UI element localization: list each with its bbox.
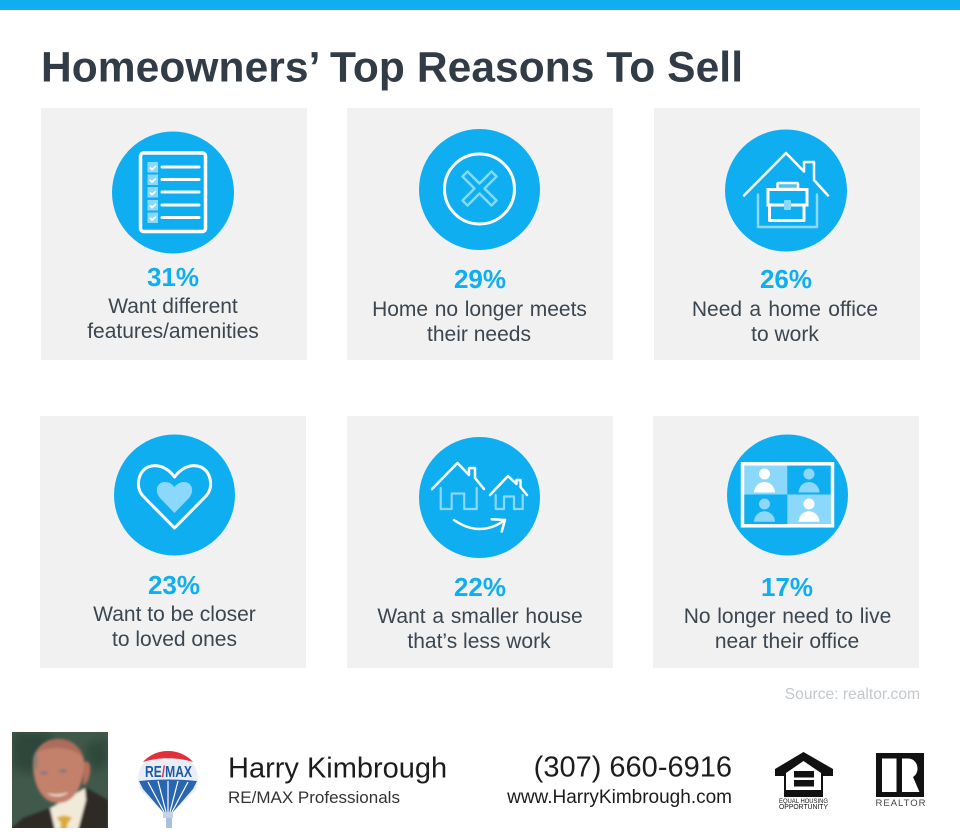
stat: 22%: 22% [454,572,506,602]
agency: RE/MAX Professionals [228,788,400,807]
panel: closer to loved ones [40,416,306,668]
description: near their office [715,630,859,653]
website: www.HarryKimbrough.com [506,787,732,808]
description: Home no longer meets [372,298,587,321]
stat: 31%: 31% [147,262,199,292]
icon: heart [114,434,235,556]
description: Need a home office [692,298,878,321]
icon: crossed circle [419,129,540,250]
panel: no longer meets needs [347,108,613,360]
agent name: Harry Kimbrough [228,752,447,784]
description: Want to be closer [93,603,256,626]
stat: 26%: 26% [760,264,812,294]
equal housing logo: EQUAL HOUSING [779,798,828,805]
description: No longer need to live [684,605,891,628]
agent photo [10,732,108,830]
icon: video call grid [727,434,848,556]
description: to work [751,323,819,346]
icon: checklist [112,132,234,254]
icon: two houses with arrow [419,437,540,558]
title: Homeowners’ Top Reasons To Sell [41,44,743,92]
icon: house with briefcase [725,130,847,252]
source: Source: realtor.com [785,686,920,703]
description: Want different [108,295,238,318]
description: that’s less work [407,630,551,653]
panel: smaller house [347,416,613,668]
RE/MAX balloon logo: RE/MAX [145,764,192,781]
panel: no longer near office [653,416,919,668]
stat: 17%: 17% [761,572,813,602]
stat: 23%: 23% [148,570,200,600]
panel: different features [41,108,307,360]
description: Want a smaller house [377,605,583,628]
description: their needs [427,323,531,346]
equal housing logo [775,752,833,811]
stat: 29%: 29% [454,264,506,294]
top bar [0,0,960,10]
description: to loved ones [112,628,237,651]
realtor logo [876,753,926,809]
equal housing logo: OPPORTUNITY [779,804,828,811]
realtor logo: REALTOR [876,798,926,809]
description: features/amenities [87,320,259,343]
panel: home office [654,108,920,360]
phone: (307) 660-6916 [534,752,732,784]
RE/MAX balloon logo [138,751,198,828]
